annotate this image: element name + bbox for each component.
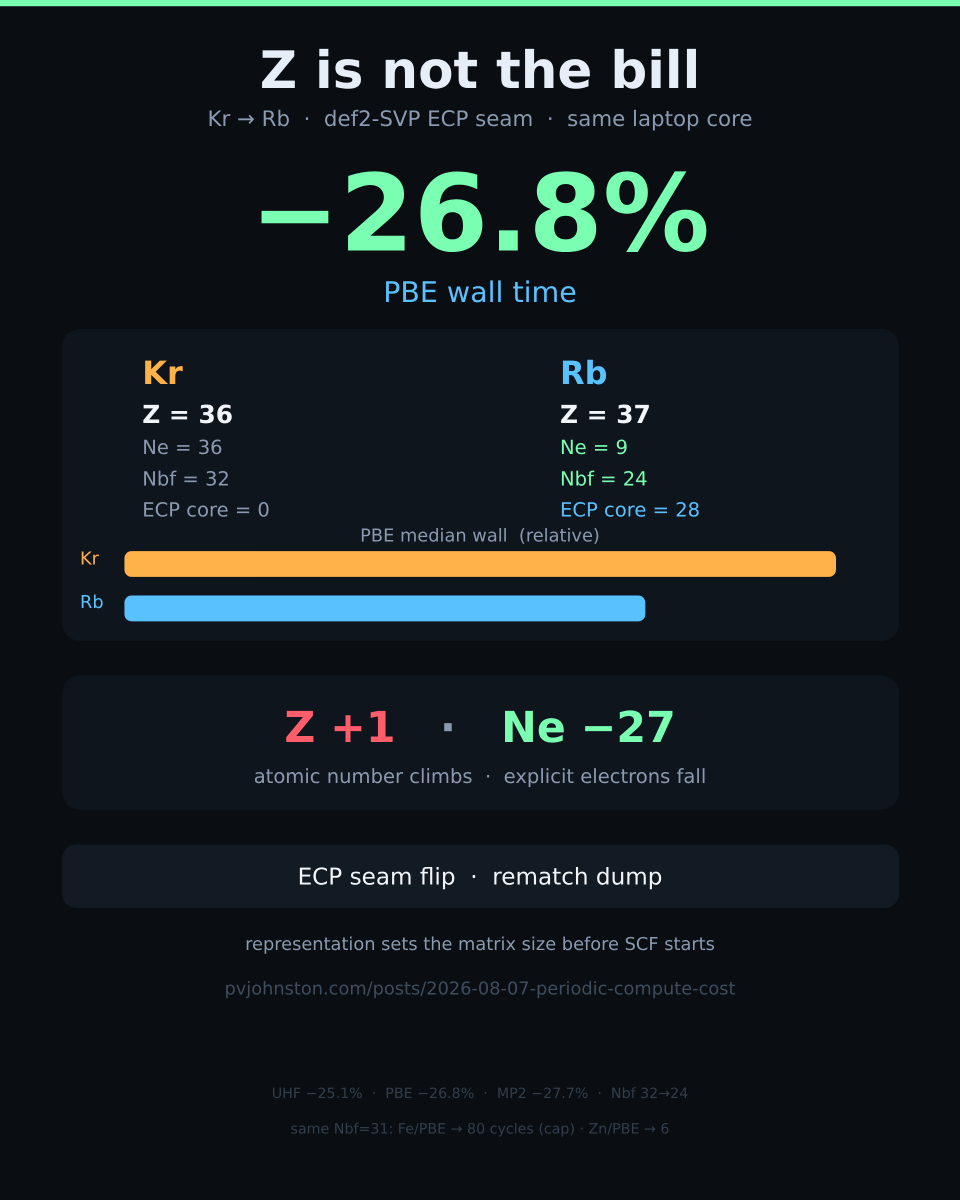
subtitle: Kr → Rb · def2-SVP ECP seam · same laptop core [207, 107, 753, 132]
separator: · [440, 703, 456, 753]
Rb bar label: Rb [80, 591, 104, 612]
top accent bar [0, 0, 960, 6]
footnote 1: UHF −25.1% · PBE −26.8% · MP2 −27.7% · Nbf 32→24 [272, 1084, 688, 1101]
Rb column: Ne = 9 [560, 437, 628, 460]
Rb column: Z = 37 [560, 400, 651, 429]
panel: action [62, 844, 899, 908]
bar chart [80, 548, 836, 621]
delta Z: Z +1 [284, 703, 396, 753]
Kr bar [124, 551, 836, 577]
caption: atomic number climbs · explicit electrons fall [254, 766, 706, 788]
Rb column: Rb [560, 356, 608, 392]
title: Z is not the bill [260, 40, 700, 100]
Kr column: Nbf = 32 [142, 468, 230, 491]
Kr bar label: Kr [80, 548, 100, 569]
Kr column: ECP core = 0 [142, 500, 270, 522]
panel: deltas [62, 676, 899, 810]
delta Ne: Ne −27 [501, 703, 676, 753]
Kr column: Ne = 36 [142, 437, 223, 460]
bar chart heading: PBE median wall (relative) [360, 524, 600, 546]
source url: pvjohnston.com/posts/2026-08-07-periodic-compute-cost [224, 978, 736, 999]
panel: action: ECP seam flip · rematch dump [298, 864, 662, 891]
Kr column: Kr [142, 356, 183, 392]
Rb bar [124, 596, 645, 621]
note: representation sets the matrix size before SCF starts [245, 933, 715, 955]
Kr column [142, 356, 270, 522]
Rb column: Nbf = 24 [560, 468, 648, 491]
Kr column: Z = 36 [142, 400, 233, 429]
Rb column [560, 356, 700, 522]
hero number: −26.8% [250, 153, 710, 276]
hero label: PBE wall time [383, 276, 577, 309]
Rb column: ECP core = 28 [560, 500, 700, 522]
footnote 2: same Nbf=31: Fe/PBE → 80 cycles (cap) · Zn/PBE → 6 [291, 1120, 669, 1137]
panel: comparison [62, 329, 899, 641]
